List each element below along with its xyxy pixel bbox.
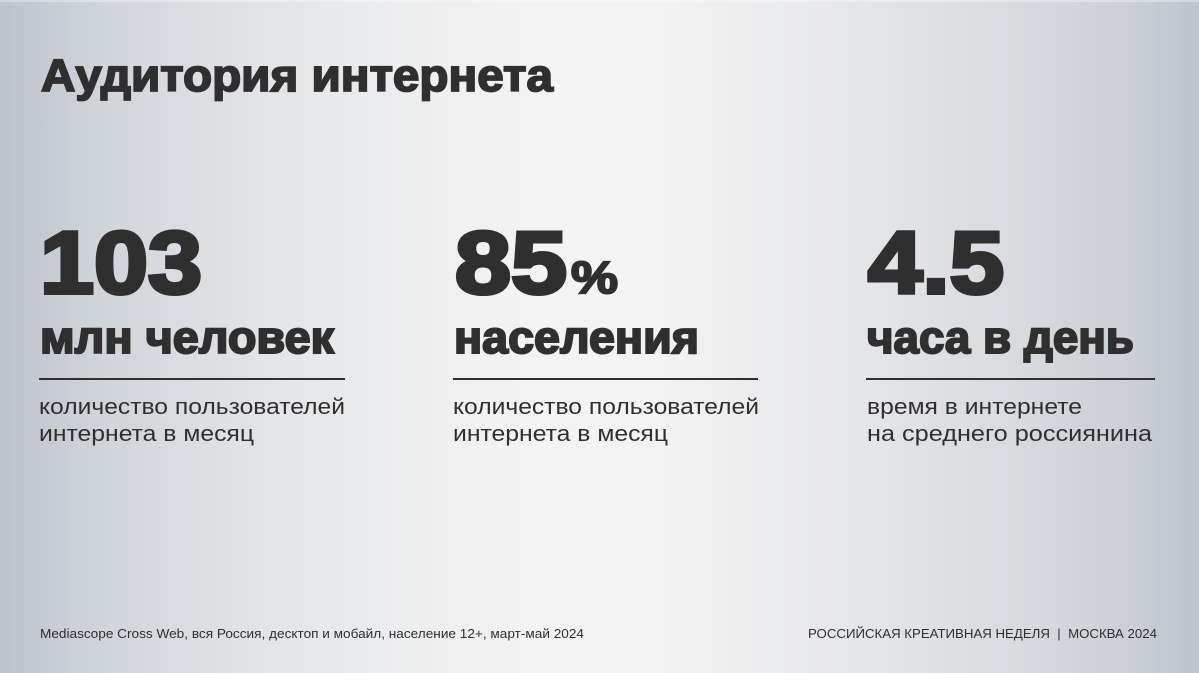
source note: Mediascope Cross Web, вся Россия, десктоп и мобайл, население 12+, март-май 2024 (40, 627, 584, 641)
description line 2: на среднего россиянина (867, 421, 1153, 446)
unit: hours per day: часа в день (867, 312, 1134, 363)
panel: daily time (866, 213, 1155, 446)
description line 2: интернета в месяц (39, 421, 254, 446)
big number: 85: 85 (455, 213, 567, 312)
divider line (39, 378, 345, 380)
description line 2: интернета в месяц (453, 421, 668, 446)
divider line (866, 378, 1155, 380)
divider line (453, 378, 758, 380)
panel: monthly audience (39, 213, 345, 446)
description: количество пользователей (453, 394, 759, 419)
unit: million people: млн человек (40, 312, 334, 363)
title: Аудитория интернета (41, 50, 554, 101)
event label: РОССИЙСКАЯ КРЕАТИВНАЯ НЕДЕЛЯ | МОСКВА 2024 (808, 626, 1157, 641)
big number: 103: 103 (40, 213, 202, 312)
description: время в интернете (867, 394, 1082, 419)
big number: 4.5: 4.5 (868, 213, 1004, 312)
unit: of population: населения (454, 312, 699, 363)
panel: population share (453, 213, 759, 446)
percent sign: % (571, 252, 618, 303)
description: количество пользователей (39, 394, 345, 419)
